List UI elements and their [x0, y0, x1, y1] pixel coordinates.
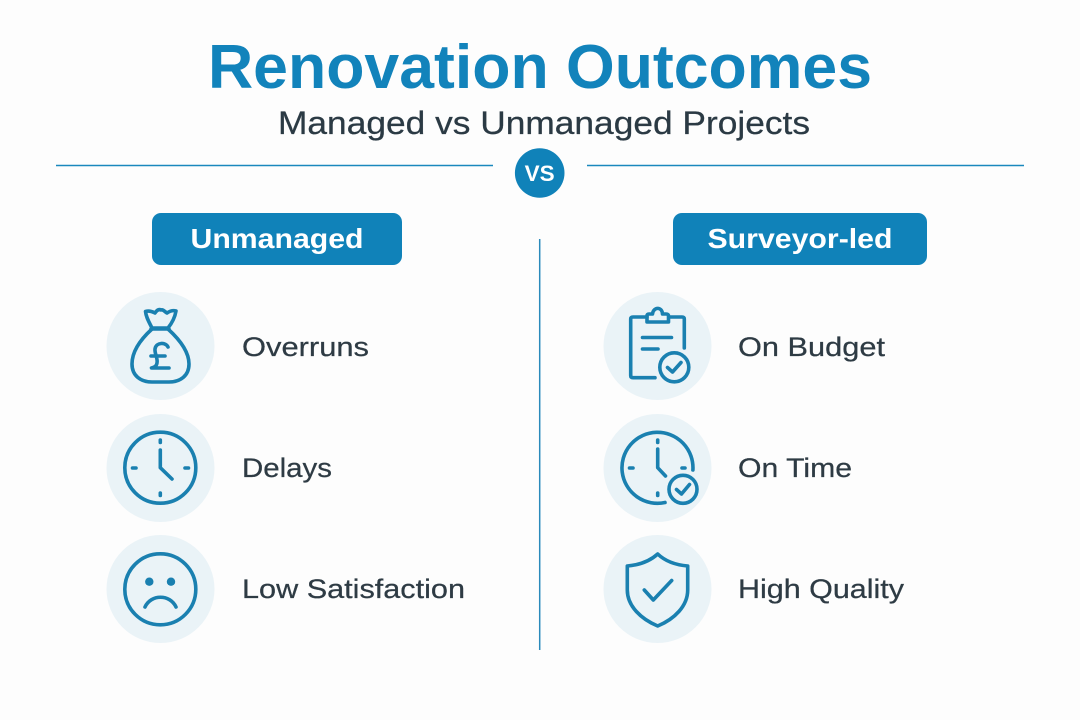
icon: clipboard with check [631, 308, 689, 382]
item: low satisfaction [106, 535, 465, 643]
icon: money bag with pound sign [132, 310, 189, 382]
label: High Quality [738, 574, 905, 604]
label: On Budget [738, 332, 886, 362]
title: Renovation Outcomes [208, 33, 872, 102]
icon: clock with check [622, 432, 697, 503]
divider with VS badge [56, 148, 1024, 198]
item: on time [604, 414, 852, 522]
icon: sad face [125, 554, 196, 625]
subtitle: Managed vs Unmanaged Projects [278, 105, 810, 141]
item: overruns [106, 292, 369, 400]
icon: clock [125, 432, 196, 503]
heading: Unmanaged [152, 213, 402, 265]
panel: surveyor-led [604, 213, 927, 643]
heading: Unmanaged: Unmanaged [190, 223, 364, 254]
item: on budget [604, 292, 886, 400]
icon: shield with check [627, 554, 688, 626]
label: Low Satisfaction [242, 574, 465, 604]
heading: Surveyor-led [673, 213, 927, 265]
item: delays [106, 414, 332, 522]
heading: Surveyor-led: Surveyor-led [708, 223, 892, 254]
label: On Time [738, 453, 852, 483]
divider with VS badge: VS [525, 161, 555, 186]
label: Overruns [242, 332, 369, 362]
label: Delays [242, 453, 332, 483]
panel: unmanaged [106, 213, 465, 643]
item: high quality [604, 535, 905, 643]
column divider [539, 239, 541, 650]
